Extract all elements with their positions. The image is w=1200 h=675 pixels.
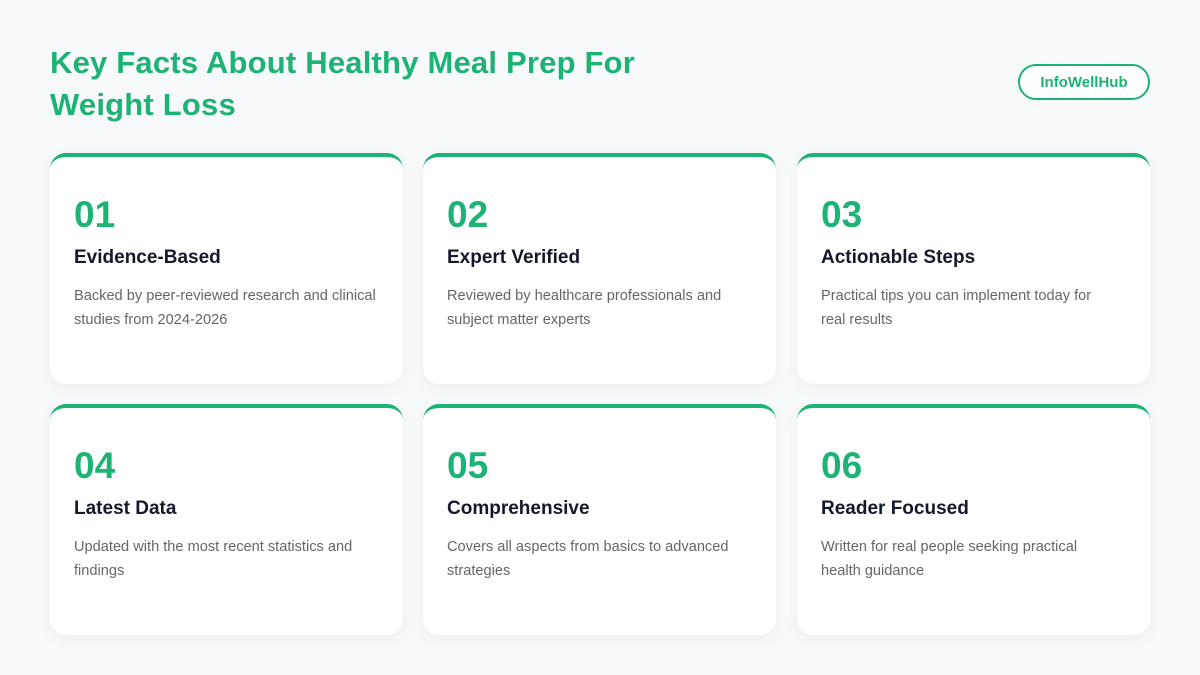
- panel: 04: [50, 404, 403, 635]
- panel: 02: Expert Verified: [447, 247, 580, 268]
- panel: 04: Updated with the most recent statistics and: [74, 539, 352, 555]
- panel: 05: 05: [447, 445, 488, 486]
- panel: 06: 06: [821, 445, 862, 486]
- panel: 02: 02: [447, 194, 488, 235]
- panel: 06: Reader Focused: [821, 498, 969, 519]
- panel: 03: [797, 153, 1150, 384]
- panel: 03: 03: [821, 194, 862, 235]
- panel: 05: Comprehensive: [447, 498, 590, 519]
- panel: 01: Evidence-Based: [74, 247, 221, 268]
- panel: 04: 04: [74, 445, 115, 486]
- panel: 04: findings: [74, 563, 124, 579]
- panel: 01: 01: [74, 194, 115, 235]
- panel: 02: [423, 153, 776, 384]
- panel: 06: health guidance: [821, 563, 924, 579]
- title: Key Facts About Healthy Meal Prep For Weight Loss: [50, 45, 635, 122]
- panel: 03: real results: [821, 312, 892, 328]
- panel: 06: Written for real people seeking practical: [821, 539, 1077, 555]
- panel: 01: studies from 2024-2026: [74, 312, 227, 328]
- panel: 03: Actionable Steps: [821, 247, 975, 268]
- panel: 05: [423, 404, 776, 635]
- panel: 05: strategies: [447, 563, 510, 579]
- panel: 01: [50, 153, 403, 384]
- badge: InfoWellHub: [1040, 74, 1128, 91]
- panel: 03: Practical tips you can implement today for: [821, 288, 1091, 304]
- panel: 01: Backed by peer-reviewed research and clinical: [74, 288, 376, 304]
- panel: 04: Latest Data: [74, 498, 176, 519]
- panel: 02: subject matter experts: [447, 312, 591, 328]
- badge: [1018, 64, 1150, 100]
- panel: 05: Covers all aspects from basics to advanced: [447, 539, 728, 555]
- panel: 02: Reviewed by healthcare professionals and: [447, 288, 721, 304]
- panel: 06: [797, 404, 1150, 635]
